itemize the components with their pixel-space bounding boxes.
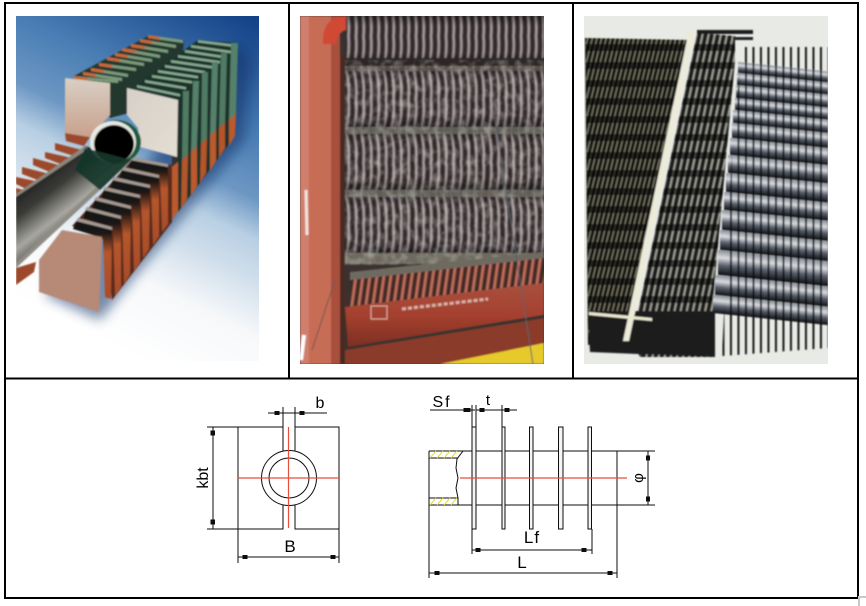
dimension b: b (316, 395, 325, 412)
dimension t: t (486, 392, 491, 409)
dimension L: L (517, 553, 527, 572)
left side fin stubs behind the tube (16, 133, 90, 285)
lower header tube (345, 283, 544, 347)
dimension Sf: Sf (432, 394, 452, 411)
dimension Lf (472, 528, 592, 554)
mottled deposits on the fins (345, 60, 544, 265)
centre line (460, 477, 627, 479)
yellow floor (440, 343, 544, 364)
dimension b (268, 395, 327, 414)
dimension B: B (284, 537, 296, 556)
dimension t (476, 392, 517, 427)
red painted fin row (350, 252, 544, 308)
right vertical fins (722, 47, 828, 356)
right tube rows (713, 62, 828, 325)
upper right fin block (137, 40, 238, 212)
dimension phi: φ (630, 473, 647, 483)
tube (16, 146, 132, 268)
lower red pipe (345, 318, 544, 364)
tube body (429, 451, 655, 578)
corner artefact (859, 597, 866, 606)
fin outline (238, 407, 339, 529)
tube opening (75, 120, 141, 190)
white strips (589, 30, 695, 341)
red elbow (323, 16, 346, 44)
photo: black finned tube bank (584, 16, 828, 364)
top dark flange (697, 30, 753, 40)
rear plates (65, 78, 178, 157)
photo: welded spiral fin panel (300, 16, 544, 364)
diagram: finned tube side view (429, 392, 655, 578)
tube circles (262, 450, 316, 506)
bottom dark block (588, 311, 715, 357)
dimension Sf (430, 394, 476, 427)
left fin block (585, 38, 688, 345)
yellow hatching (430, 451, 457, 505)
fins (472, 427, 592, 529)
dimension phi (630, 451, 650, 505)
lower row of fins (72, 157, 172, 300)
front plate (39, 230, 102, 312)
fin rows (345, 16, 544, 264)
right side fin edges, green over orange (171, 43, 238, 221)
chalk marks and wire (301, 120, 533, 364)
dimension L (429, 553, 617, 574)
left steel frame (308, 16, 332, 364)
dimension B (238, 529, 339, 563)
centre lines (238, 427, 339, 528)
middle fin block (632, 33, 735, 357)
dimension Lf: Lf (524, 528, 540, 547)
upper left fin block (74, 35, 184, 118)
dimension kbt (195, 427, 238, 529)
diagram: fin front view (195, 395, 339, 563)
dimension kbt: kbt (195, 467, 212, 489)
photo: cutaway finned tube render (16, 16, 259, 361)
